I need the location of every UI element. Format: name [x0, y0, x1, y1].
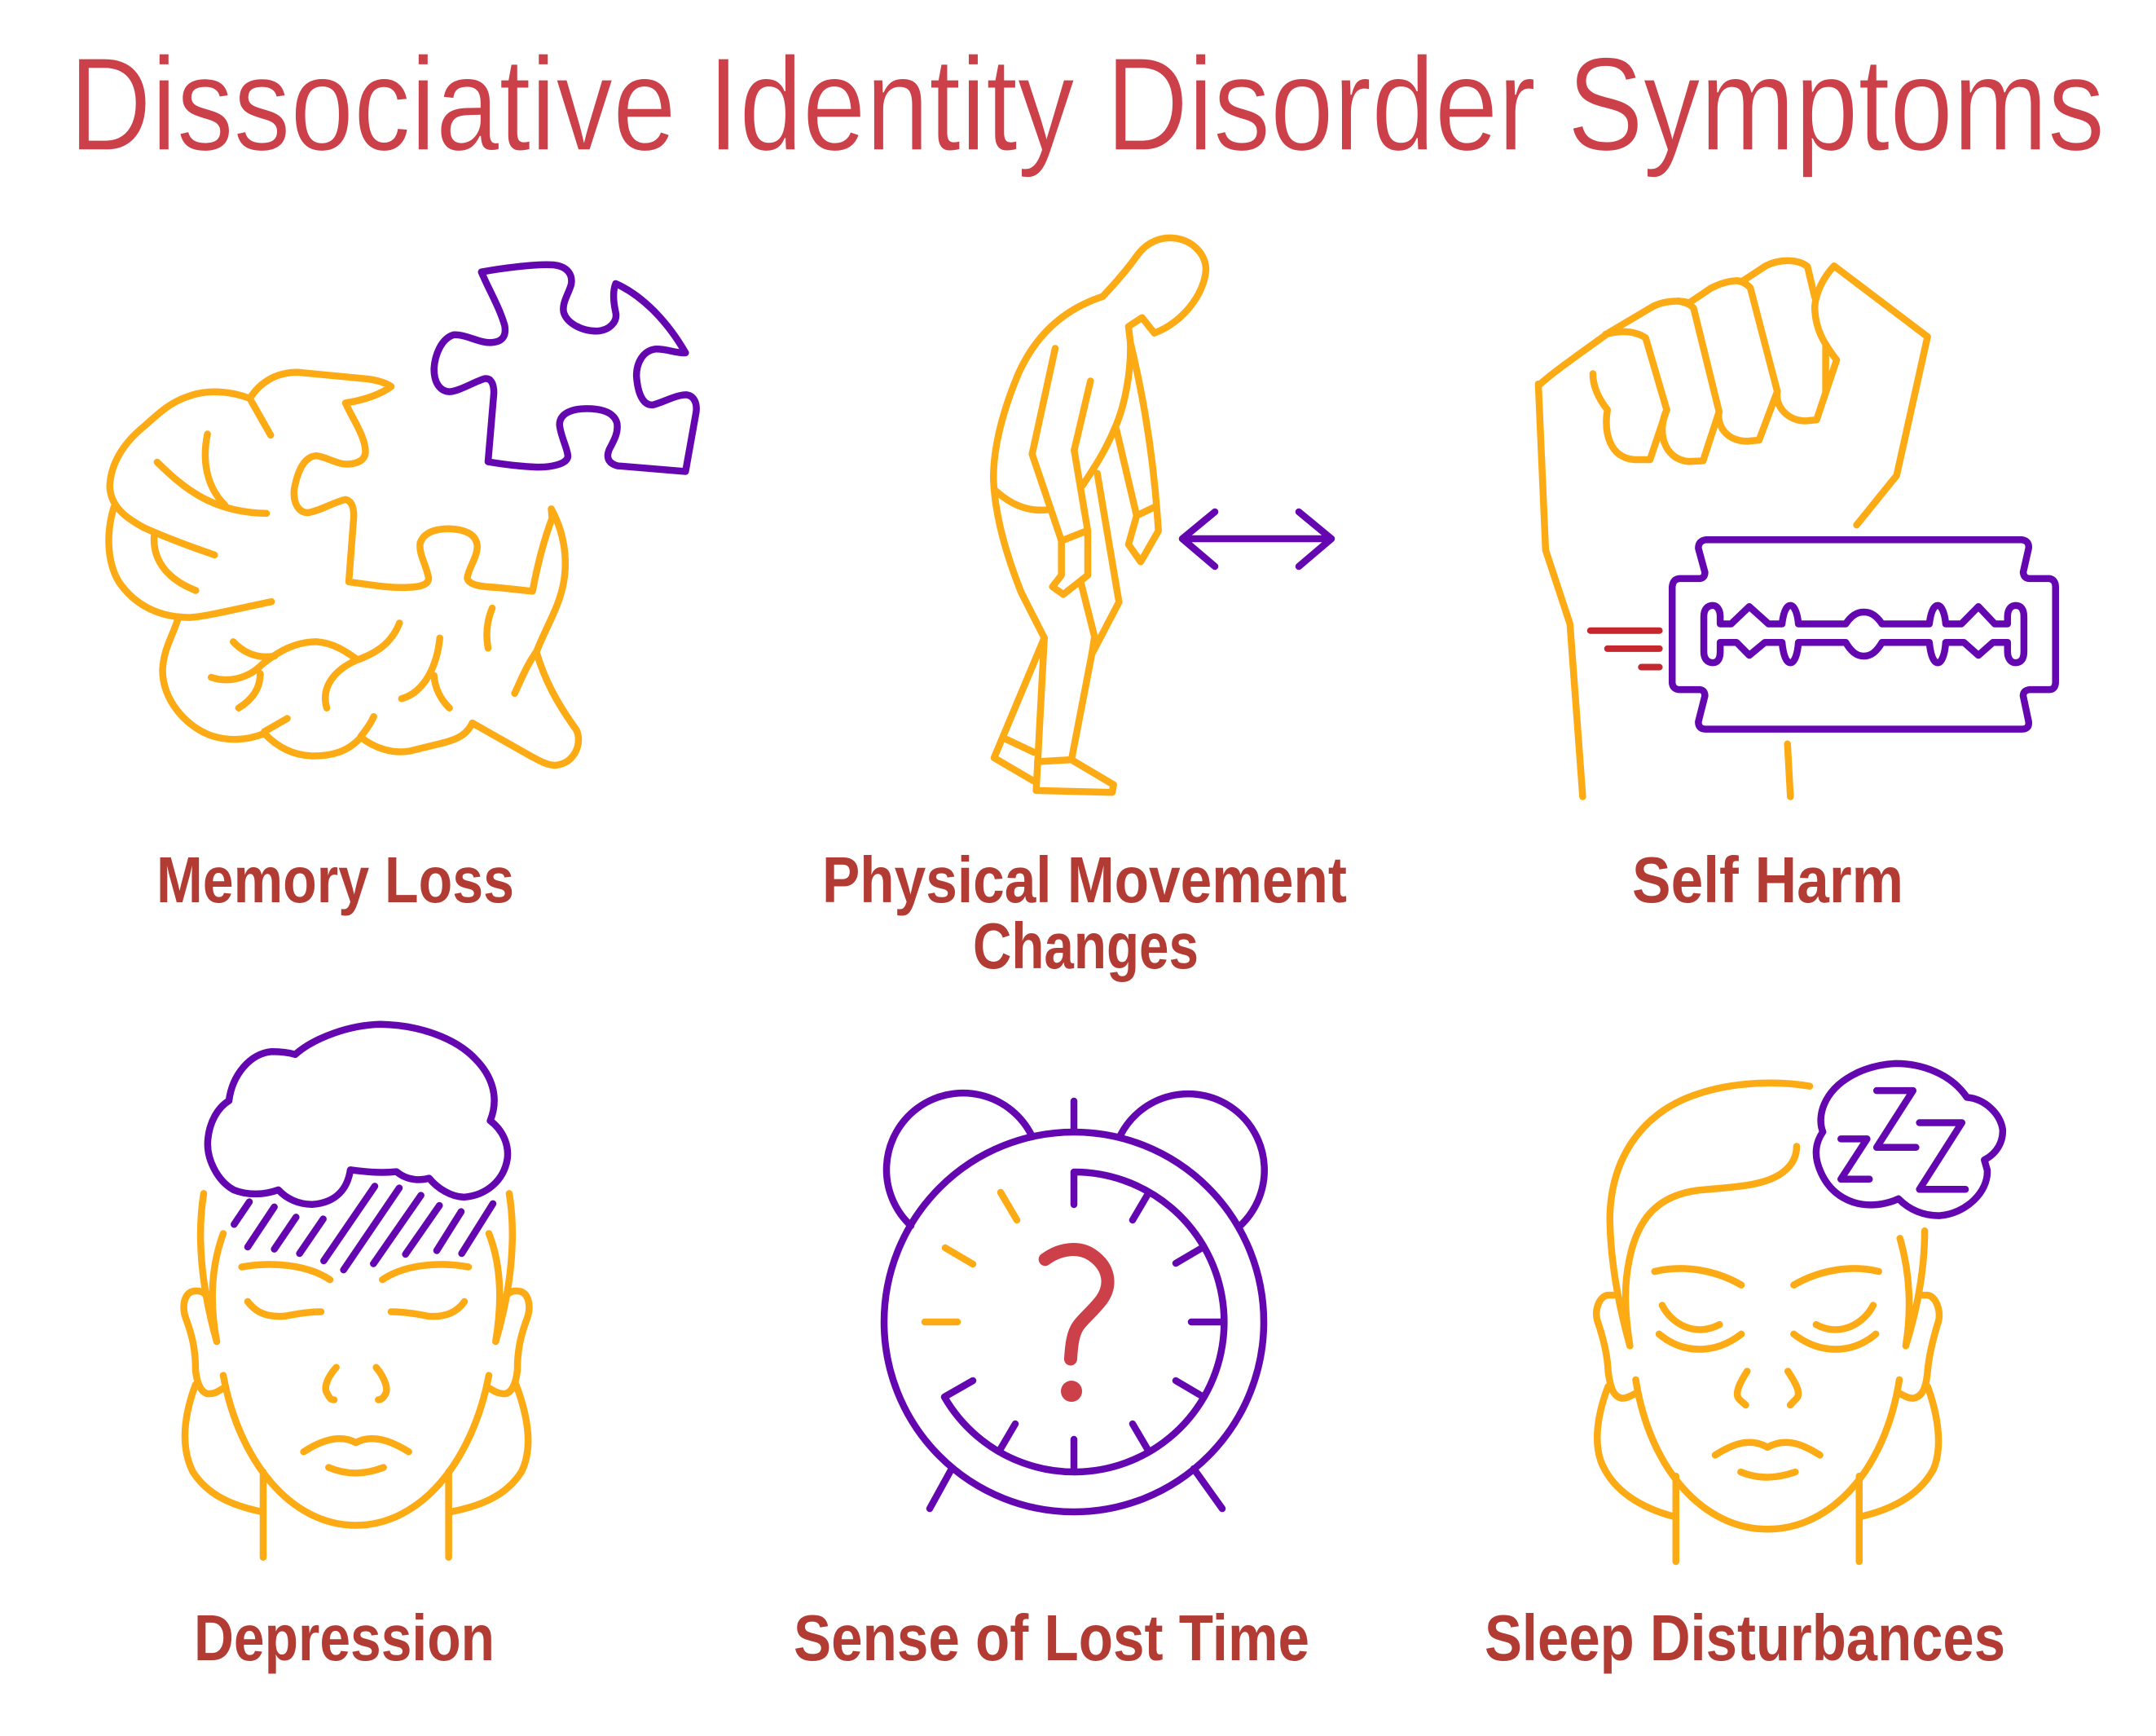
arrow: double headed [1182, 512, 1331, 566]
puzzle piece [434, 265, 697, 471]
z letters [1841, 1091, 1965, 1189]
icon: sleeping face with thought cloud [1596, 1064, 2003, 1562]
label: Memory Loss: Memory Loss [156, 844, 514, 916]
label: Physical Movement Changes: Changes [973, 910, 1199, 982]
orange ticks [925, 1192, 1017, 1322]
sleeping face [1596, 1083, 1939, 1562]
icon: face with rain cloud [184, 1024, 529, 1558]
brain outline [109, 372, 579, 765]
question mark [1045, 1249, 1108, 1359]
label: Physical Movement Changes: Physical Movement [822, 844, 1347, 916]
fist [1538, 261, 1928, 797]
label: Sense of Lost Time: Sense of Lost Time [794, 1602, 1309, 1674]
label: Physical Movement Changes [822, 844, 1347, 982]
label: Sleep Disturbances: Sleep Disturbances [1485, 1602, 2005, 1674]
thought cloud [1816, 1064, 2003, 1216]
clock body [884, 1093, 1265, 1512]
red cut lines [1591, 631, 1660, 668]
icon: alarm clock with question mark [884, 1093, 1265, 1512]
label: Depression: Depression [194, 1602, 495, 1674]
icon: fist and razor blade [1538, 261, 2056, 797]
icon: stooped person [993, 238, 1206, 792]
face [184, 1193, 529, 1558]
label: Self Harm: Self Harm [1632, 844, 1903, 916]
rain [234, 1186, 493, 1270]
cloud [208, 1024, 508, 1205]
icon: brain with missing puzzle piece [109, 265, 697, 765]
razor blade [1672, 540, 2056, 729]
